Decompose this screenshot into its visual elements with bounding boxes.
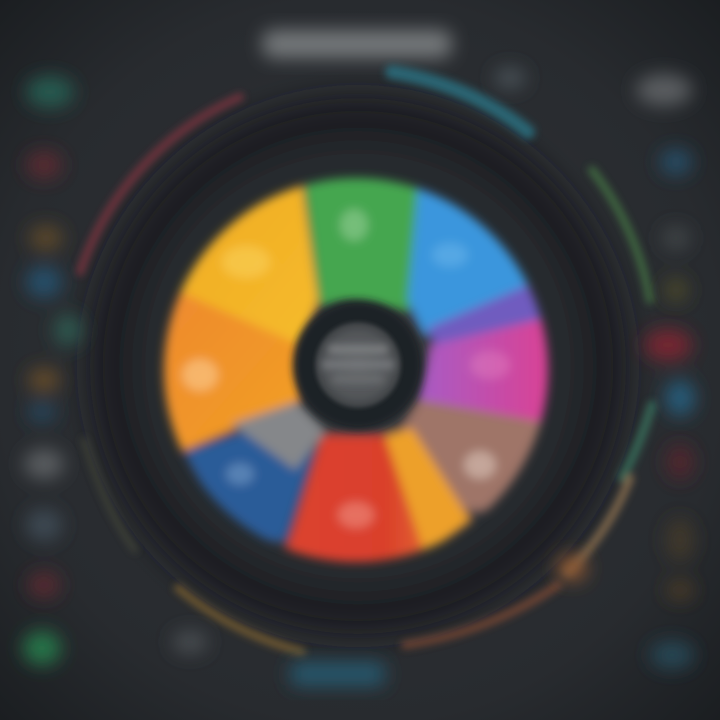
accent: grey label top bbox=[494, 67, 526, 89]
colour wheel bbox=[140, 165, 560, 570]
accent: orange node lower right bbox=[557, 555, 587, 581]
segment: yellow bbox=[170, 170, 318, 345]
dark outer ring bbox=[90, 98, 626, 634]
segment: orange bbox=[156, 288, 306, 460]
arc: green right bbox=[592, 170, 650, 300]
wheel base bbox=[180, 188, 486, 552]
small accents around the ring bbox=[172, 67, 695, 654]
hub inner disc bbox=[315, 322, 401, 408]
accent: red node right bbox=[644, 329, 692, 361]
arc: teal upper right bbox=[392, 72, 528, 132]
segment: tan bbox=[400, 400, 560, 510]
centre hub bbox=[293, 300, 423, 430]
icon: magenta segment bbox=[470, 351, 510, 379]
arc: orange bottom left bbox=[178, 588, 302, 652]
segment: grey bbox=[232, 402, 325, 470]
icon: green segment bbox=[340, 209, 368, 241]
segment: blue bbox=[400, 182, 533, 342]
segment: green bbox=[302, 165, 422, 310]
segment: navy blue bbox=[185, 415, 318, 540]
arc: tan lower right bbox=[568, 478, 630, 572]
segment: purple bbox=[428, 282, 560, 345]
hub dark ring bbox=[293, 300, 423, 430]
icon: blue segment bbox=[432, 243, 468, 267]
left legend column bbox=[23, 76, 82, 665]
arc: rust bottom right bbox=[405, 585, 558, 645]
title bbox=[262, 30, 452, 58]
icon: yellow segment bbox=[222, 246, 270, 278]
arc: olive lower left bbox=[84, 440, 135, 550]
icon: orange segment bbox=[182, 359, 218, 391]
hub label bbox=[322, 345, 394, 383]
segment: red bbox=[280, 436, 430, 570]
segment: magenta bbox=[420, 315, 560, 425]
segment: amber bbox=[385, 428, 470, 555]
icon: navy segment bbox=[226, 463, 254, 485]
arc: red upper left bbox=[80, 97, 240, 272]
bottom blue label bbox=[290, 662, 385, 686]
accent: blue node right bbox=[665, 380, 695, 416]
icon: red segment bbox=[338, 502, 374, 528]
accent: grey label bottom left bbox=[172, 630, 208, 654]
arc: teal lower right bbox=[622, 405, 652, 478]
coloured outer arcs bbox=[80, 72, 652, 652]
icon: tan segment bbox=[464, 451, 496, 479]
right legend column bbox=[636, 74, 694, 669]
